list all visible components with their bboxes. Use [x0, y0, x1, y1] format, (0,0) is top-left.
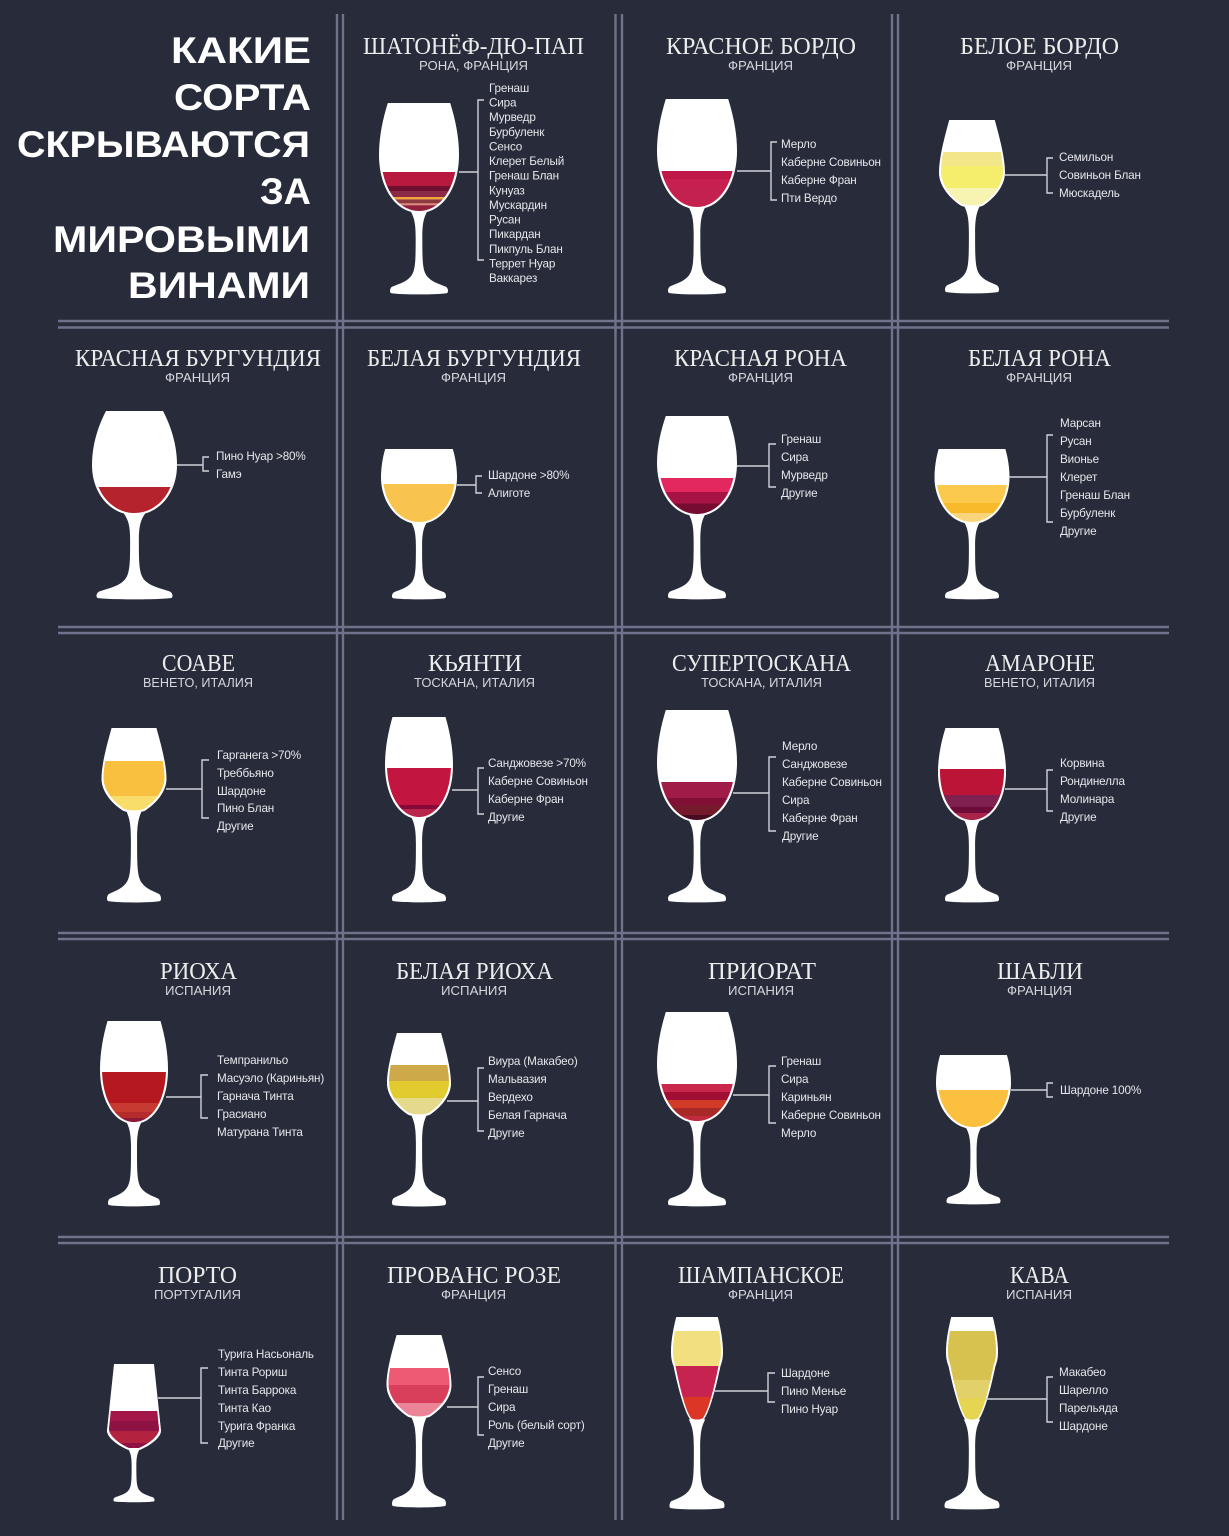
bracket — [737, 142, 777, 200]
bracket — [447, 1377, 484, 1435]
grape list: Сенсо — [489, 140, 523, 154]
grape list: Санджовезе >70% — [488, 757, 586, 770]
bracket — [459, 100, 484, 260]
heading: ФРАНЦИЯ — [728, 58, 793, 73]
icon: wine glass — [385, 717, 453, 902]
bracket — [166, 1075, 208, 1118]
heading: ТОСКАНА, ИТАЛИЯ — [701, 675, 822, 690]
heading — [363, 34, 584, 73]
grape list: Шардоне 100% — [1060, 1084, 1141, 1097]
icon: wine glass — [386, 1335, 452, 1508]
grape list: Виура (Макабео) — [488, 1055, 578, 1068]
heading: БЕЛАЯ РИОХА — [396, 959, 554, 985]
panel: Порто — [100, 1263, 314, 1502]
grape list: Сира — [782, 794, 810, 807]
grape list: Гренаш — [781, 433, 821, 446]
bracket — [447, 1068, 484, 1131]
icon: wine glass — [657, 99, 737, 294]
grape list: Марсан — [1060, 417, 1101, 430]
grape list: Другие — [1060, 811, 1097, 824]
heading — [674, 346, 848, 385]
grape list: Другие — [218, 1437, 255, 1450]
heading: ПОРТО — [158, 1263, 237, 1289]
bracket — [737, 444, 776, 487]
icon: champagne flute — [944, 1317, 1000, 1510]
grape list: Гарганега >70% — [217, 749, 301, 762]
grape list: Пино Блан — [217, 802, 274, 815]
grape list: Другие — [488, 1437, 525, 1450]
grape list: Мускардин — [489, 199, 547, 212]
heading: ФРАНЦИЯ — [165, 370, 230, 385]
grape list: Шардоне >80% — [488, 469, 569, 482]
grape list: Мерло — [782, 740, 818, 753]
grape list: Мурведр — [781, 469, 828, 482]
panel: Красная Бургундия — [75, 346, 321, 599]
grape list: Шардоне — [1059, 1420, 1108, 1433]
grape list: Гарнача Тинта — [217, 1090, 294, 1103]
grape list: Сира — [488, 1401, 516, 1414]
heading — [984, 651, 1095, 690]
grape list: Кунуаз — [489, 184, 525, 197]
panel: Соаве — [95, 651, 301, 902]
grape list: Другие — [1060, 525, 1097, 538]
icon: wine glass — [657, 416, 737, 600]
grape list: Алиготе — [488, 487, 530, 500]
grape list: Сира — [489, 97, 517, 110]
grape list: Другие — [488, 1127, 525, 1140]
grape list: Гренаш Блан — [1060, 489, 1130, 502]
icon: wine glass — [938, 728, 1006, 902]
icon: wine glass — [657, 1012, 737, 1206]
grape list: Белая Гарнача — [488, 1109, 567, 1122]
grape list: Вердехо — [488, 1091, 533, 1104]
panel: Красная Рона — [650, 346, 848, 599]
grape list: Другие — [782, 830, 819, 843]
panel: Кава — [940, 1263, 1118, 1509]
heading: ПОРТУГАЛИЯ — [154, 1287, 241, 1302]
bracket — [1005, 770, 1053, 811]
heading: ФРАНЦИЯ — [1006, 58, 1072, 73]
grape list: Каберне Фран — [488, 793, 564, 806]
icon: wine glass — [936, 1055, 1011, 1204]
grape list: Совиньон Блан — [1059, 169, 1141, 182]
icon: wine glass — [107, 1364, 161, 1502]
heading — [160, 959, 238, 998]
heading: БЕЛАЯ РОНА — [968, 346, 1112, 372]
heading — [367, 346, 581, 385]
grape list: Клерет — [1060, 471, 1098, 484]
grape list: Турига Насьональ — [218, 1348, 314, 1361]
heading — [143, 651, 253, 690]
heading: РИОХА — [160, 959, 238, 985]
heading — [1006, 1263, 1072, 1302]
grape list: Мурведр — [489, 111, 536, 124]
heading: КРАСНАЯ РОНА — [674, 346, 848, 372]
grape list: Другие — [217, 820, 254, 833]
icon: wine glass — [100, 1021, 168, 1206]
heading: СУПЕРТОСКАНА — [672, 651, 852, 677]
grape list: Пино Нуар — [781, 1403, 839, 1416]
grape list: Каберне Фран — [781, 174, 857, 187]
panel: Супертоскана — [650, 651, 882, 902]
grape list: Мерло — [781, 1127, 817, 1140]
title: СКРЫВАЮТСЯ — [17, 124, 310, 165]
heading: ШАБЛИ — [997, 959, 1083, 985]
grape list: Шардоне — [781, 1367, 830, 1380]
panel: Риоха — [95, 959, 324, 1206]
bracket — [1011, 1083, 1053, 1097]
grape list: Другие — [488, 811, 525, 824]
heading: ФРАНЦИЯ — [1006, 370, 1072, 385]
panel: Амароне — [930, 651, 1125, 902]
icon: wine glass — [92, 411, 177, 600]
heading — [154, 1263, 241, 1302]
heading — [960, 34, 1119, 73]
panel: Белая Риоха — [380, 959, 578, 1206]
title: КАКИЕ — [171, 30, 311, 71]
grape list: Парельяда — [1059, 1402, 1118, 1415]
grape list: Гренаш — [489, 82, 529, 95]
grape list: Тинта Рориш — [218, 1366, 287, 1379]
heading: РОНА, ФРАНЦИЯ — [419, 58, 528, 73]
heading — [75, 346, 321, 385]
grape list: Бурбуленк — [489, 126, 545, 139]
heading: ИСПАНИЯ — [1006, 1287, 1072, 1302]
heading: ВЕНЕТО, ИТАЛИЯ — [143, 675, 253, 690]
heading — [414, 651, 535, 690]
bracket — [733, 1066, 776, 1123]
heading: АМАРОНЕ — [985, 651, 1095, 677]
grape list: Макабео — [1059, 1366, 1106, 1379]
grape list: Темпранильо — [217, 1054, 289, 1067]
bracket — [1005, 158, 1053, 193]
panel: Прованс Розе — [380, 1263, 585, 1507]
grape list: Сира — [781, 1073, 809, 1086]
heading: БЕЛОЕ БОРДО — [960, 34, 1119, 60]
heading — [666, 34, 856, 73]
grape list: Гамэ — [216, 468, 242, 481]
heading: КРАСНАЯ БУРГУНДИЯ — [75, 346, 321, 372]
heading: ФРАНЦИЯ — [728, 370, 793, 385]
icon: wine glass — [102, 728, 166, 902]
icon: wine glass — [381, 449, 457, 600]
bracket — [177, 457, 209, 471]
heading: ПРОВАНС РОЗЕ — [387, 1263, 561, 1289]
heading — [396, 959, 554, 998]
grape list: Каберне Совиньон — [488, 775, 588, 788]
grape list: Пино Нуар >80% — [216, 450, 306, 463]
grape list: Тинта Баррока — [218, 1384, 297, 1397]
heading: ИСПАНИЯ — [728, 983, 794, 998]
grape list: Шарелло — [1059, 1384, 1109, 1397]
title: СОРТА — [174, 77, 311, 118]
grape list: Гренаш Блан — [489, 170, 559, 183]
grape list: Пикардан — [489, 228, 541, 241]
panel: Кьянти — [380, 651, 588, 902]
heading — [387, 1263, 561, 1302]
heading: ИСПАНИЯ — [441, 983, 507, 998]
grape list: Сира — [781, 451, 809, 464]
heading: КЬЯНТИ — [428, 651, 522, 677]
grape list: Русан — [1060, 435, 1092, 448]
panel: Шампанское — [665, 1263, 846, 1509]
heading: ШАТОНЁФ-ДЮ-ПАП — [363, 34, 584, 60]
grape list: Масуэло (Кариньян) — [217, 1072, 324, 1085]
grape list: Роль (белый сорт) — [488, 1419, 585, 1432]
grape list: Корвина — [1060, 757, 1105, 770]
bracket — [457, 476, 482, 493]
grape list: Другие — [781, 487, 818, 500]
grape list: Сенсо — [488, 1365, 522, 1378]
grape list: Кариньян — [781, 1091, 831, 1104]
grape list: Треббьяно — [217, 767, 274, 780]
heading: КАВА — [1010, 1263, 1070, 1289]
panel: Белая Бургундия — [367, 346, 581, 599]
bracket — [452, 768, 484, 814]
bracket — [158, 1368, 208, 1443]
grape list: Ваккарез — [489, 272, 537, 285]
grape list: Семильон — [1059, 151, 1113, 164]
grape list: Рондинелла — [1060, 775, 1125, 788]
title — [17, 30, 311, 306]
panel: Красное Бордо — [650, 34, 881, 294]
grape list: Тинта Као — [218, 1402, 272, 1415]
icon: wine glass — [387, 1033, 451, 1206]
grape list: Мюскадель — [1059, 187, 1120, 200]
panel: Шабли — [930, 959, 1141, 1204]
grape list: Пикпуль Блан — [489, 243, 563, 256]
grape list: Русан — [489, 214, 521, 227]
heading: СОАВЕ — [162, 651, 235, 677]
grape list: Гренаш — [488, 1383, 528, 1396]
heading: ТОСКАНА, ИТАЛИЯ — [414, 675, 535, 690]
grape list: Санджовезе — [782, 758, 847, 771]
grape list: Клерет Белый — [489, 155, 564, 168]
heading — [678, 1263, 844, 1302]
panel: Белое Бордо — [930, 34, 1141, 293]
grape list: Матурана Тинта — [217, 1126, 303, 1139]
grape list: Мерло — [781, 138, 817, 151]
heading: ФРАНЦИЯ — [1007, 983, 1072, 998]
heading: ШАМПАНСКОЕ — [678, 1263, 844, 1289]
title: ЗА — [260, 171, 311, 212]
heading: ФРАНЦИЯ — [441, 370, 506, 385]
heading: ФРАНЦИЯ — [441, 1287, 506, 1302]
grape list: Пино Менье — [781, 1385, 846, 1398]
grape list: Гренаш — [781, 1055, 821, 1068]
bracket — [166, 760, 209, 818]
heading: ФРАНЦИЯ — [728, 1287, 793, 1302]
grape list: Каберне Совиньон — [781, 156, 881, 169]
grape list: Вионье — [1060, 453, 1099, 466]
icon: wine glass — [379, 103, 459, 294]
panel: Приорат — [650, 959, 881, 1206]
grape list: Каберне Совиньон — [781, 1109, 881, 1122]
heading: ВЕНЕТО, ИТАЛИЯ — [984, 675, 1095, 690]
grape list: Каберне Совиньон — [782, 776, 882, 789]
heading: ИСПАНИЯ — [165, 983, 231, 998]
grape list: Молинара — [1060, 793, 1115, 806]
title: МИРОВЫМИ — [53, 219, 310, 260]
panel: Белая Рона — [930, 346, 1130, 599]
icon: wine glass — [939, 120, 1005, 294]
grape list: Каберне Фран — [782, 812, 858, 825]
icon: wine glass — [657, 710, 737, 902]
grape list: Мальвазия — [488, 1073, 547, 1086]
grape list: Грасиано — [217, 1108, 267, 1121]
heading — [968, 346, 1112, 385]
grape list: Турига Франка — [218, 1420, 296, 1433]
grape list: Бурбуленк — [1060, 507, 1116, 520]
icon: wine glass — [934, 449, 1010, 600]
bracket — [713, 1373, 775, 1402]
heading — [708, 959, 816, 998]
bracket — [733, 757, 776, 831]
grape list: Террет Нуар — [489, 257, 556, 270]
heading: БЕЛАЯ БУРГУНДИЯ — [367, 346, 581, 372]
grape list: Пти Вердо — [781, 192, 838, 205]
bracket — [1009, 435, 1053, 522]
heading: КРАСНОЕ БОРДО — [666, 34, 856, 60]
panel: Шатонёф-дю-Пап — [363, 34, 584, 294]
grape list: Шардоне — [217, 785, 266, 798]
heading — [997, 959, 1083, 998]
title: ВИНАМИ — [128, 265, 310, 306]
bracket — [985, 1377, 1053, 1422]
heading — [672, 651, 852, 690]
heading: ПРИОРАТ — [708, 959, 816, 985]
icon: champagne flute — [670, 1317, 724, 1510]
